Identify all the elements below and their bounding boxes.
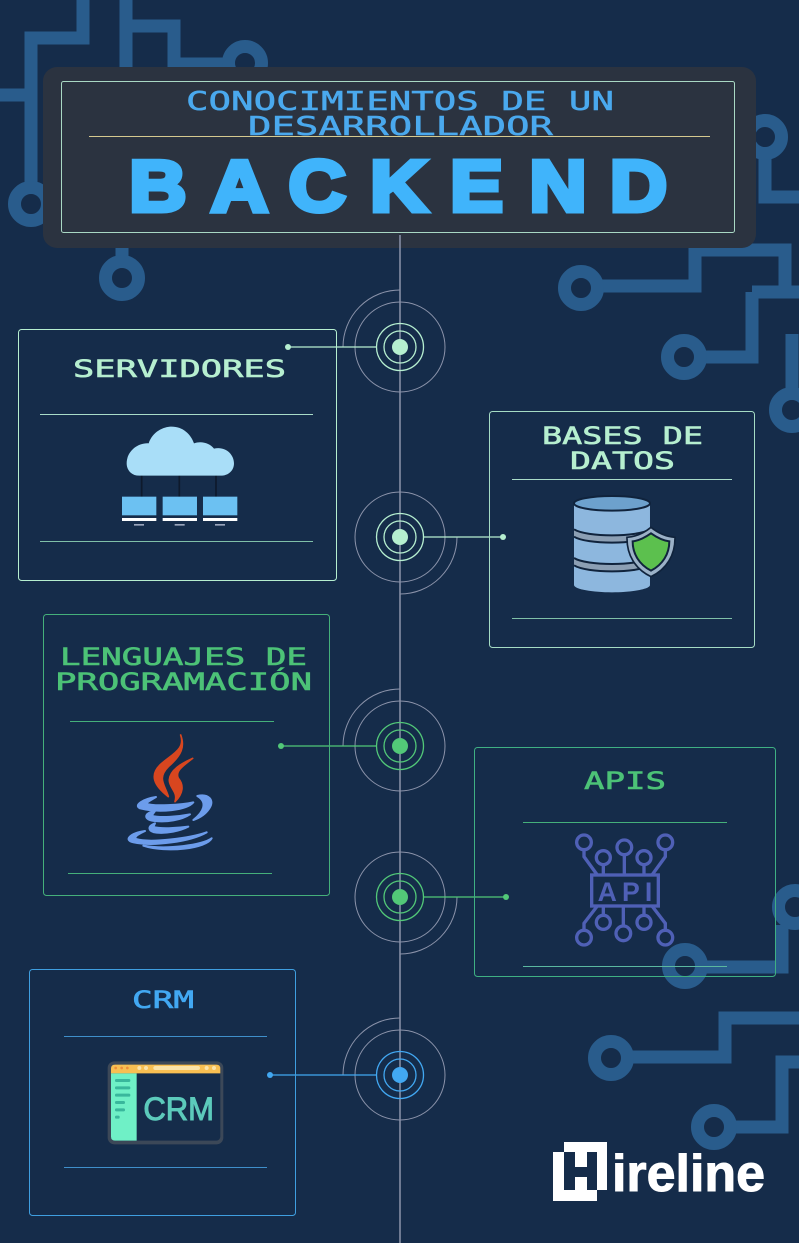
node: lenguajes [278, 689, 445, 791]
timeline vertical line [399, 235, 401, 1243]
heading: lenguajes de programacion [55, 643, 312, 696]
heading: servidores: SERVIDORES [73, 355, 286, 383]
heading: lenguajes de programacion: LENGUAJES DE [60, 643, 307, 671]
node: apis [355, 852, 509, 954]
icon: database with shield [574, 496, 675, 592]
subtitle [186, 87, 614, 142]
icon: cloud network [122, 427, 237, 526]
icon: crm window: CRM [143, 1091, 214, 1127]
node: crm [267, 1018, 445, 1120]
panel: lenguajes de programacion [44, 614, 330, 896]
icon: hireline mark [553, 1142, 607, 1201]
icon: crm window [108, 1061, 223, 1144]
node: bases de datos [355, 492, 506, 594]
heading: bases de datos: BASES DE [542, 422, 703, 450]
icon: java cup [129, 735, 212, 849]
node: servidores [285, 290, 445, 392]
wordmark: ireline [612, 1145, 765, 1203]
logo: hireline [553, 1142, 765, 1203]
subtitle: DESARROLLADOR [248, 112, 554, 142]
heading: apis: APIS [584, 767, 666, 795]
title: BACKEND [129, 146, 667, 227]
header panel [43, 67, 756, 248]
heading: lenguajes de programacion: PROGRAMACIÓN [55, 666, 312, 696]
heading: crm: CRM [132, 986, 194, 1014]
panel: bases de datos [490, 412, 754, 648]
icon: api chip [577, 835, 673, 945]
icon: api chip: API [598, 877, 652, 907]
panel: crm [30, 970, 296, 1216]
subtitle: CONOCIMIENTOS DE UN [186, 87, 614, 117]
heading: bases de datos [542, 422, 703, 475]
panel: servidores [18, 330, 336, 580]
panel: apis [474, 748, 776, 976]
heading: bases de datos: DATOS [570, 447, 675, 475]
